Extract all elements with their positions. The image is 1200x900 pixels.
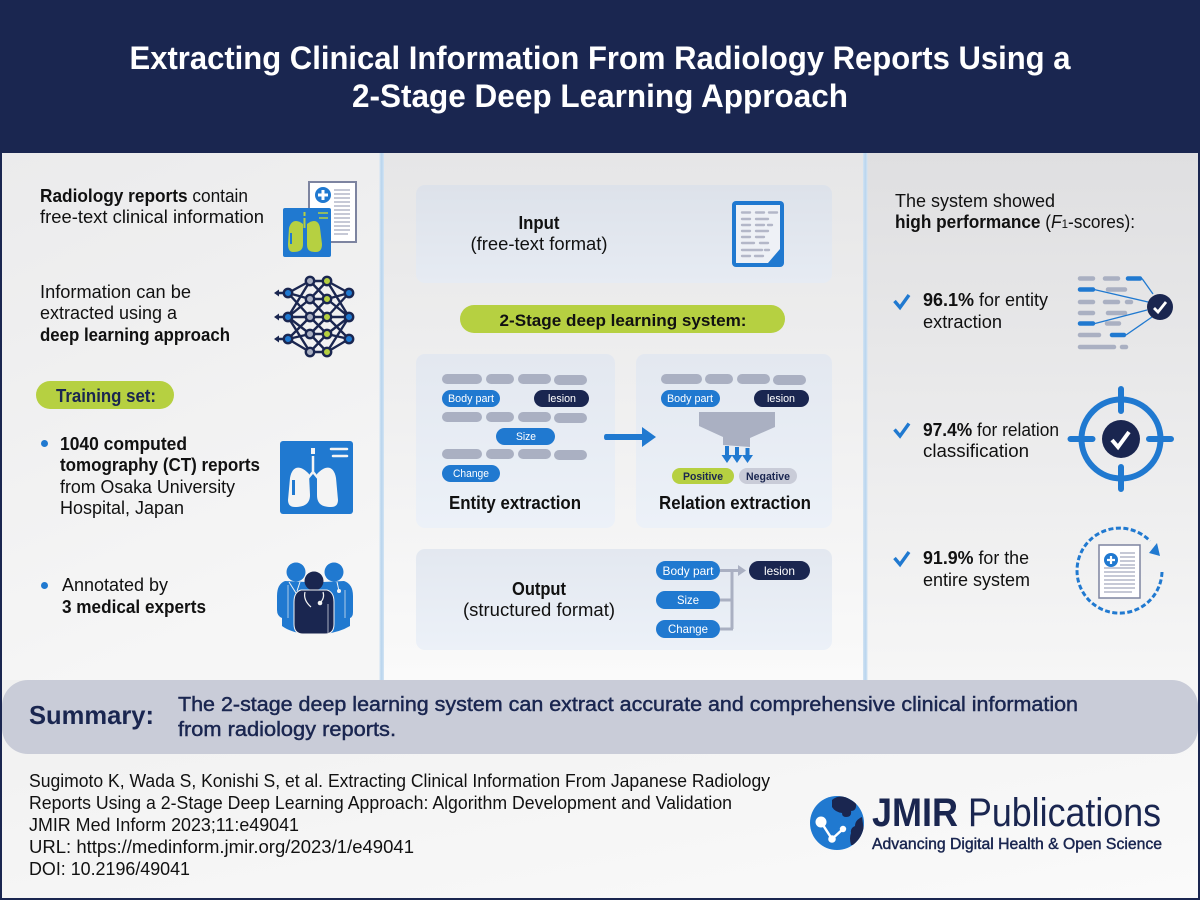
bullet: CT reports: 1040 computed <box>60 434 187 454</box>
result: entity extraction <box>894 290 1048 332</box>
citation: Reports Using a 2-Stage Deep Learning Approach: Algorithm Development and Validation <box>29 793 732 813</box>
panel: input <box>416 185 832 283</box>
text: information extraction <box>40 282 230 345</box>
title: Extracting Clinical Information From Radiology Reports Using a <box>130 40 1071 76</box>
tag: lesion <box>754 390 809 407</box>
tag: negative: Negative <box>746 471 790 483</box>
logo tagline: Advancing Digital Health & Open Science <box>872 836 1162 853</box>
text: output label: (structured format) <box>463 600 615 620</box>
result: entire system <box>894 548 1030 590</box>
panel: entity extraction <box>416 354 615 528</box>
tag: body part <box>442 390 500 407</box>
text: input label: (free-text format) <box>470 234 608 254</box>
summary text: The 2-stage deep learning system can extract accurate and comprehensive clinical information <box>178 694 1078 716</box>
text: input label: Input <box>518 213 560 233</box>
text: information extraction: extracted using a <box>40 303 178 323</box>
panel: relation extraction <box>636 354 832 528</box>
result: entire system: entire system <box>923 570 1030 590</box>
icon: report with lungs <box>283 182 356 257</box>
logo: JMIR Publications <box>810 791 1162 853</box>
title: 2-Stage Deep Learning Approach <box>352 78 848 114</box>
logo globe <box>810 796 866 850</box>
icon: entity check <box>1080 278 1173 347</box>
result: relation classification: 97.4% for relation <box>923 420 1059 440</box>
logo publications: Publications <box>968 791 1161 835</box>
tag: negative <box>739 468 797 484</box>
tag: lesion: lesion <box>764 564 795 578</box>
heading: 2-stage deep learning system <box>460 305 785 333</box>
result: relation classification: classification <box>923 441 1029 461</box>
label: entity extraction: Entity extraction <box>449 493 581 513</box>
bullet: CT reports <box>41 434 260 518</box>
tag: body part: Body part <box>667 393 713 405</box>
text: information extraction: Information can be <box>40 282 191 302</box>
text: input label <box>470 213 608 254</box>
heading: 2-stage deep learning system: 2-Stage deep learning system: <box>500 311 746 330</box>
text: performance heading: The system showed <box>895 191 1055 211</box>
logo wordmark: JMIR <box>872 791 958 835</box>
tag: change <box>656 620 720 638</box>
citation: URL: https://medinform.jmir.org/2023/1/e49041 <box>29 837 414 857</box>
result: relation classification <box>894 420 1059 461</box>
panel: background and training set <box>36 182 356 634</box>
result: entire system: 91.9% for the <box>923 548 1029 568</box>
text: output label: Output <box>512 579 566 599</box>
tag: change: Change <box>453 468 489 480</box>
icon: target <box>1070 389 1171 489</box>
text: free-text clinical information: free-text clinical information <box>40 207 264 227</box>
tag: lesion <box>534 390 589 407</box>
connector <box>720 565 746 629</box>
summary bar <box>2 680 1198 754</box>
icon: free-text document <box>732 201 784 267</box>
tag: body part <box>656 561 720 580</box>
heading: training set <box>36 381 174 409</box>
tag: size <box>656 591 720 609</box>
bullet: CT reports: tomography (CT) reports <box>60 455 260 475</box>
bullet: annotators <box>41 575 206 617</box>
result: entity extraction: extraction <box>923 312 1002 332</box>
tag: body part <box>661 390 720 407</box>
tag: size <box>496 428 555 445</box>
citation: JMIR Med Inform 2023;11:e49041 <box>29 815 299 835</box>
tag: body part: Body part <box>448 393 494 405</box>
text: radiology reports: Radiology reports contain <box>40 186 248 206</box>
panel: performance <box>894 191 1173 613</box>
tag: positive: Positive <box>683 471 723 483</box>
tag: size: Size <box>677 593 699 607</box>
title <box>130 40 1071 114</box>
summary text: from radiology reports. <box>178 719 396 741</box>
citation: Sugimoto K, Wada S, Konishi S, et al. Extracting Clinical Information From Japanese Radiology <box>29 771 770 791</box>
label: relation extraction: Relation extraction <box>659 493 811 513</box>
tag: change <box>442 465 500 482</box>
citation: DOI: 10.2196/49041 <box>29 859 190 879</box>
heading: training set: Training set: <box>56 386 156 406</box>
bullet: CT reports: Hospital, Japan <box>60 498 184 518</box>
tag: positive <box>672 468 734 484</box>
tag: lesion: lesion <box>767 393 795 405</box>
text: information extraction: deep learning approach <box>40 325 230 345</box>
text: output label <box>463 579 615 620</box>
text: performance heading <box>895 191 1135 232</box>
text rows <box>442 374 587 460</box>
tag: lesion <box>749 561 810 580</box>
citation <box>29 771 770 879</box>
icon: funnel arrows <box>722 446 753 463</box>
bullet: annotators: 3 medical experts <box>62 597 206 617</box>
arrow: entity to relation <box>604 427 656 447</box>
panel: output <box>416 549 832 650</box>
icon: document cycle <box>1077 528 1162 613</box>
icon: medical experts <box>277 562 353 634</box>
bullet: CT reports: from Osaka University <box>60 477 235 497</box>
text: performance heading: high performance (F1-scores): <box>895 212 1135 232</box>
tag: lesion: lesion <box>548 393 576 405</box>
icon: lungs <box>280 441 353 514</box>
tag: change: Change <box>668 622 708 636</box>
icon: funnel <box>699 412 775 447</box>
tag: body part: Body part <box>662 564 714 578</box>
summary text <box>178 694 1078 741</box>
bullet: annotators: Annotated by <box>62 575 168 595</box>
text row <box>661 374 806 385</box>
summary label: Summary: <box>29 700 154 730</box>
result: entity extraction: 96.1% for entity <box>923 290 1048 310</box>
tag: size: Size <box>516 431 536 443</box>
icon: neural network <box>274 277 353 356</box>
